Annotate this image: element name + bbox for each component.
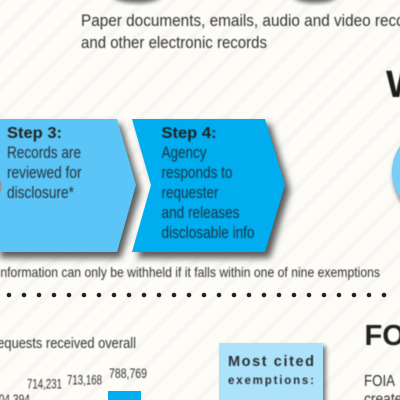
step 3 text: Step 3: <box>7 125 62 142</box>
FOIA paragraph: FOIA <box>364 373 396 390</box>
box heading: Most cited <box>228 354 314 370</box>
step 4 text <box>162 125 254 242</box>
step 3 arrow <box>0 119 141 258</box>
step 3 text: reviewed for <box>7 164 82 182</box>
step 4 text: disclosable info <box>162 224 254 242</box>
step 3 text: Records are <box>7 144 81 162</box>
most cited exemptions box <box>219 343 326 400</box>
box heading <box>228 354 314 387</box>
bar value labels: 788,769 <box>109 366 147 381</box>
FOIA paragraph <box>364 373 400 400</box>
records description text <box>81 11 400 52</box>
bar value labels: 713,168 <box>67 372 102 388</box>
step 3 text <box>7 125 82 202</box>
records description text: and other electronic records <box>81 33 267 52</box>
box heading: exemptions: <box>228 375 314 387</box>
bar value labels: 714,231 <box>27 376 62 392</box>
step 4 text: responds to <box>162 164 232 182</box>
bar <box>108 391 141 400</box>
step 4 text: Agency <box>162 144 207 162</box>
circle icon at right <box>392 126 400 223</box>
step 4 text: and releases <box>162 204 240 222</box>
bar chart: requests received overall <box>0 336 147 400</box>
step 4 arrow <box>132 119 290 258</box>
step 3 text: disclosure* <box>7 184 74 202</box>
step 4 text: Step 4: <box>162 125 216 142</box>
step 4 text: requester <box>162 184 219 202</box>
dotted divider <box>7 293 386 297</box>
bar value labels <box>0 366 147 400</box>
icon shadows at top <box>113 0 337 3</box>
